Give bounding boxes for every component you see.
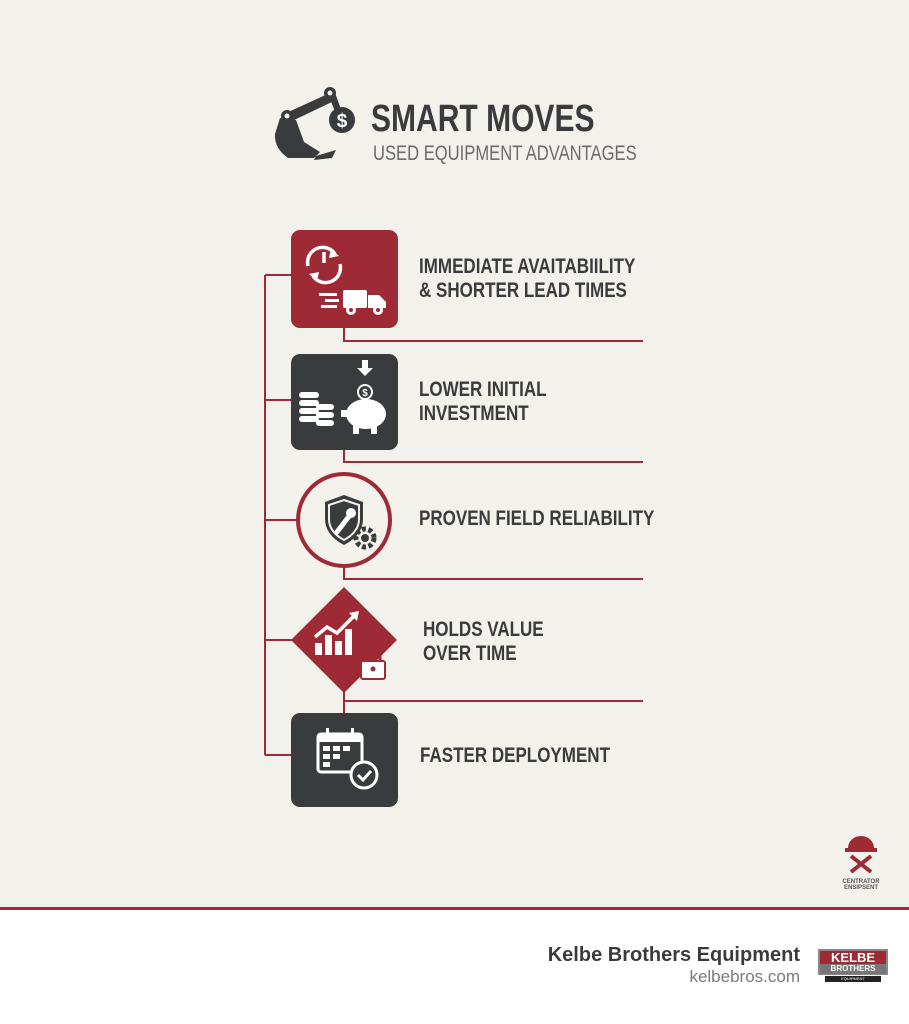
text: PROVEN FIELD RELIABILITY [419, 507, 654, 530]
footer logo: EQUIPMENT [841, 976, 865, 981]
footer logo [818, 949, 888, 982]
text: IMMEDIATE AVAITABIILITY [419, 255, 635, 278]
item 2: lower initial investment [291, 354, 547, 450]
item 5: faster deployment [291, 713, 610, 807]
text: LOWER INITIAL [419, 378, 547, 401]
icon: contractor badge [842, 836, 880, 891]
text: INVESTMENT [419, 402, 529, 425]
text: & SHORTER LEAD TIMES [419, 279, 627, 302]
icon: calendar with timer [291, 713, 398, 807]
item 1: immediate availability [291, 230, 635, 328]
footer logo: BROTHERS [831, 964, 875, 973]
icon: contractor badge: ENSIPSENT [844, 885, 878, 891]
footer company name: kelbebros.com [689, 967, 800, 986]
item 3: proven field reliability [296, 472, 654, 568]
icon: shield with wrench and gear [296, 472, 392, 568]
footer company name [548, 944, 800, 986]
footer logo: KELBE [831, 950, 875, 965]
icon: clock and truck [291, 230, 398, 328]
text [419, 255, 635, 302]
icon: excavator with dollar [274, 87, 355, 160]
icon: excavator with dollar: $ [337, 111, 348, 132]
footer divider [0, 907, 909, 910]
text: OVER TIME [423, 642, 517, 665]
subtitle: USED EQUIPMENT ADVANTAGES [373, 142, 637, 165]
text [423, 618, 544, 665]
item 4: holds value over time [292, 587, 544, 692]
icon: coins and piggy bank: $ [362, 388, 368, 399]
icon: diamond with chart and lock [292, 587, 397, 692]
title: SMART MOVES [371, 98, 594, 140]
footer company name: Kelbe Brothers Equipment [548, 944, 800, 966]
icon: coins and piggy bank [291, 354, 398, 450]
text: FASTER DEPLOYMENT [420, 744, 610, 767]
text [419, 378, 547, 425]
icon: contractor badge: CENTRATOR [842, 879, 880, 885]
text: HOLDS VALUE [423, 618, 544, 641]
